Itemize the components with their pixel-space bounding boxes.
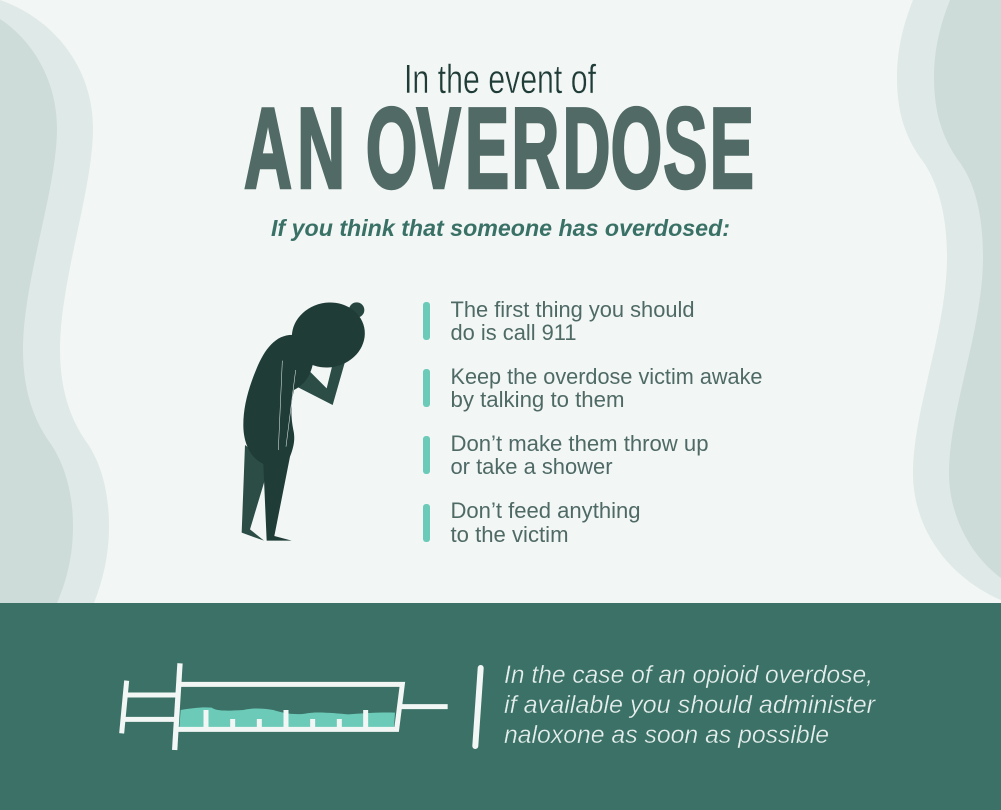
left background waves xyxy=(0,0,109,603)
bullet item 2: Keep the overdose victim awake xyxy=(450,364,762,389)
naloxone note xyxy=(504,661,877,749)
title line: an overdose: AN OVERDOSE xyxy=(244,85,754,212)
bullet item 2 xyxy=(423,364,762,412)
bullet item 3: Don’t make them throw up xyxy=(450,431,708,456)
naloxone note: In the case of an opioid overdose, xyxy=(504,661,873,689)
title line: in the event of: In the event of xyxy=(404,56,596,102)
bullet item 1: The first thing you should xyxy=(450,297,694,322)
bullet item 4: to the victim xyxy=(450,522,568,547)
title xyxy=(244,56,754,212)
bullet item 4 xyxy=(423,498,640,547)
bullet item 3: or take a shower xyxy=(450,454,612,479)
bullet item 2: by talking to them xyxy=(450,387,624,412)
naloxone note: naloxone as soon as possible xyxy=(504,721,829,749)
list of instructions xyxy=(423,297,762,547)
icon: syringe xyxy=(122,663,448,750)
bullet item 1: do is call 911 xyxy=(450,320,576,345)
bullet item 4: Don’t feed anything xyxy=(450,498,640,523)
bullet item 3 xyxy=(423,431,708,479)
naloxone note: if available you should administer xyxy=(504,691,877,719)
bullet item 1 xyxy=(423,297,694,345)
bottom band xyxy=(0,603,1001,810)
subtitle: If you think that someone has overdosed: xyxy=(271,215,730,241)
icon: hunched over figure xyxy=(242,296,371,541)
right background waves xyxy=(897,0,1001,600)
divider bar xyxy=(475,668,481,746)
